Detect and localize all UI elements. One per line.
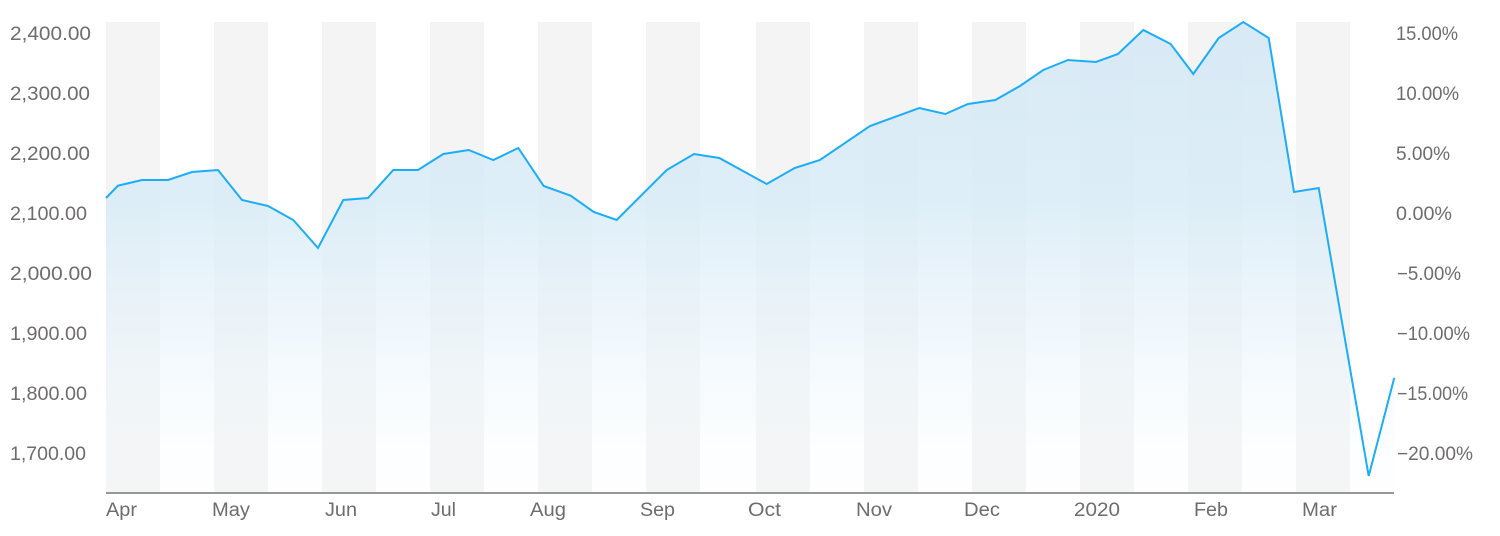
x axis month labels: 2020 [1074,500,1120,521]
x axis month labels: Jul [431,500,456,521]
x axis month labels: Jun [325,500,357,521]
x axis month labels: Oct [748,500,782,521]
left y axis labels: 1,800.00 [10,384,87,405]
right y axis labels: −20.00% [1397,443,1473,465]
right y axis labels: 5.00% [1396,143,1450,165]
right y axis labels [1396,23,1473,465]
x axis line [106,492,1394,494]
x axis month labels: May [212,500,251,521]
x axis month labels [106,500,1338,521]
left y axis labels: 2,000.00 [10,264,92,285]
x axis month labels: Nov [856,500,893,521]
x axis month labels: Dec [964,500,1000,521]
x axis month labels: Sep [640,500,675,521]
x axis month labels: Aug [530,500,566,521]
right y axis labels: 0.00% [1396,203,1452,225]
left y axis labels: 1,700.00 [10,444,86,465]
left y axis labels: 2,300.00 [10,84,90,105]
right y axis labels: −10.00% [1397,323,1470,345]
right y axis labels: 10.00% [1396,83,1459,105]
right y axis labels: −5.00% [1397,263,1461,285]
x axis month labels: Apr [106,500,138,521]
right y axis labels: 15.00% [1396,23,1458,45]
index line [106,22,1394,476]
x axis month labels: Mar [1302,500,1338,521]
left y axis labels: 2,200.00 [10,144,90,165]
month background bands [106,22,1350,492]
left y axis labels: 2,400.00 [10,24,91,45]
right y axis labels: −15.00% [1397,383,1468,405]
left y axis labels: 2,100.00 [10,204,87,225]
area fill under line [106,22,1394,492]
x axis month labels: Feb [1194,500,1228,521]
left y axis labels [10,24,92,465]
left y axis labels: 1,900.00 [10,324,87,345]
